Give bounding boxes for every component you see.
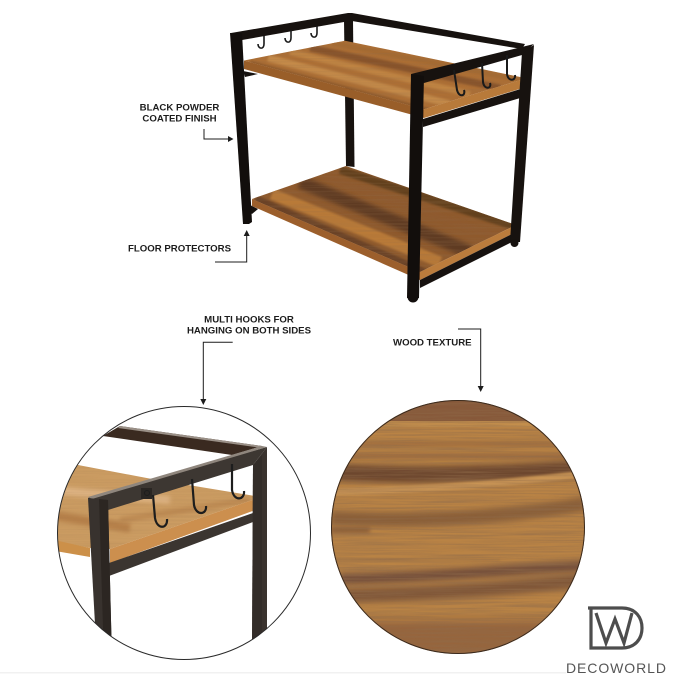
label: multi hooks bbox=[187, 314, 312, 336]
detail circle: hooks bbox=[50, 406, 310, 660]
product photo: two-tier shelf rack bbox=[230, 13, 534, 302]
right post bbox=[252, 447, 267, 650]
right leg bbox=[510, 45, 534, 242]
lower rail bbox=[109, 513, 253, 576]
arrow: to wood detail bbox=[458, 329, 484, 392]
top shelf bbox=[240, 36, 530, 118]
rear left leg bbox=[230, 33, 252, 224]
rear top rails bbox=[231, 13, 525, 49]
label: black powder coated finish: BLACK POWDER bbox=[140, 102, 219, 114]
hook brackets and hooks bbox=[141, 464, 244, 527]
logo wordmark: DECOWORLD bbox=[566, 660, 666, 676]
arrow: to frame finish bbox=[204, 129, 234, 142]
logo mark bbox=[588, 608, 642, 648]
arrow: to floor protector bbox=[215, 230, 250, 262]
detail circle: wood texture bbox=[331, 400, 585, 656]
front rail bbox=[88, 447, 267, 510]
back centre leg bbox=[344, 20, 354, 167]
label: multi hooks: HANGING ON BOTH SIDES bbox=[187, 326, 312, 336]
label: black powder coated finish bbox=[140, 102, 219, 124]
back rail bbox=[103, 426, 262, 455]
logo: DecoWorld bbox=[566, 608, 666, 676]
bottom shelf bbox=[252, 166, 512, 280]
hooks, front side bbox=[454, 55, 515, 95]
front top rail bbox=[411, 44, 534, 83]
hooks, rear side bbox=[258, 26, 317, 48]
label: floor protectors: FLOOR PROTECTORS bbox=[128, 244, 232, 254]
label: black powder coated finish: COATED FINISH bbox=[142, 114, 217, 124]
front post bbox=[88, 498, 112, 636]
label: wood texture: WOOD TEXTURE bbox=[393, 338, 472, 348]
front leg bbox=[407, 74, 424, 298]
wood shelf in detail bbox=[58, 465, 253, 563]
bottom rail bbox=[420, 232, 516, 288]
arrow: to hook detail bbox=[200, 342, 233, 405]
label: multi hooks: MULTI HOOKS FOR bbox=[204, 314, 294, 326]
upper right rail bbox=[423, 87, 527, 127]
